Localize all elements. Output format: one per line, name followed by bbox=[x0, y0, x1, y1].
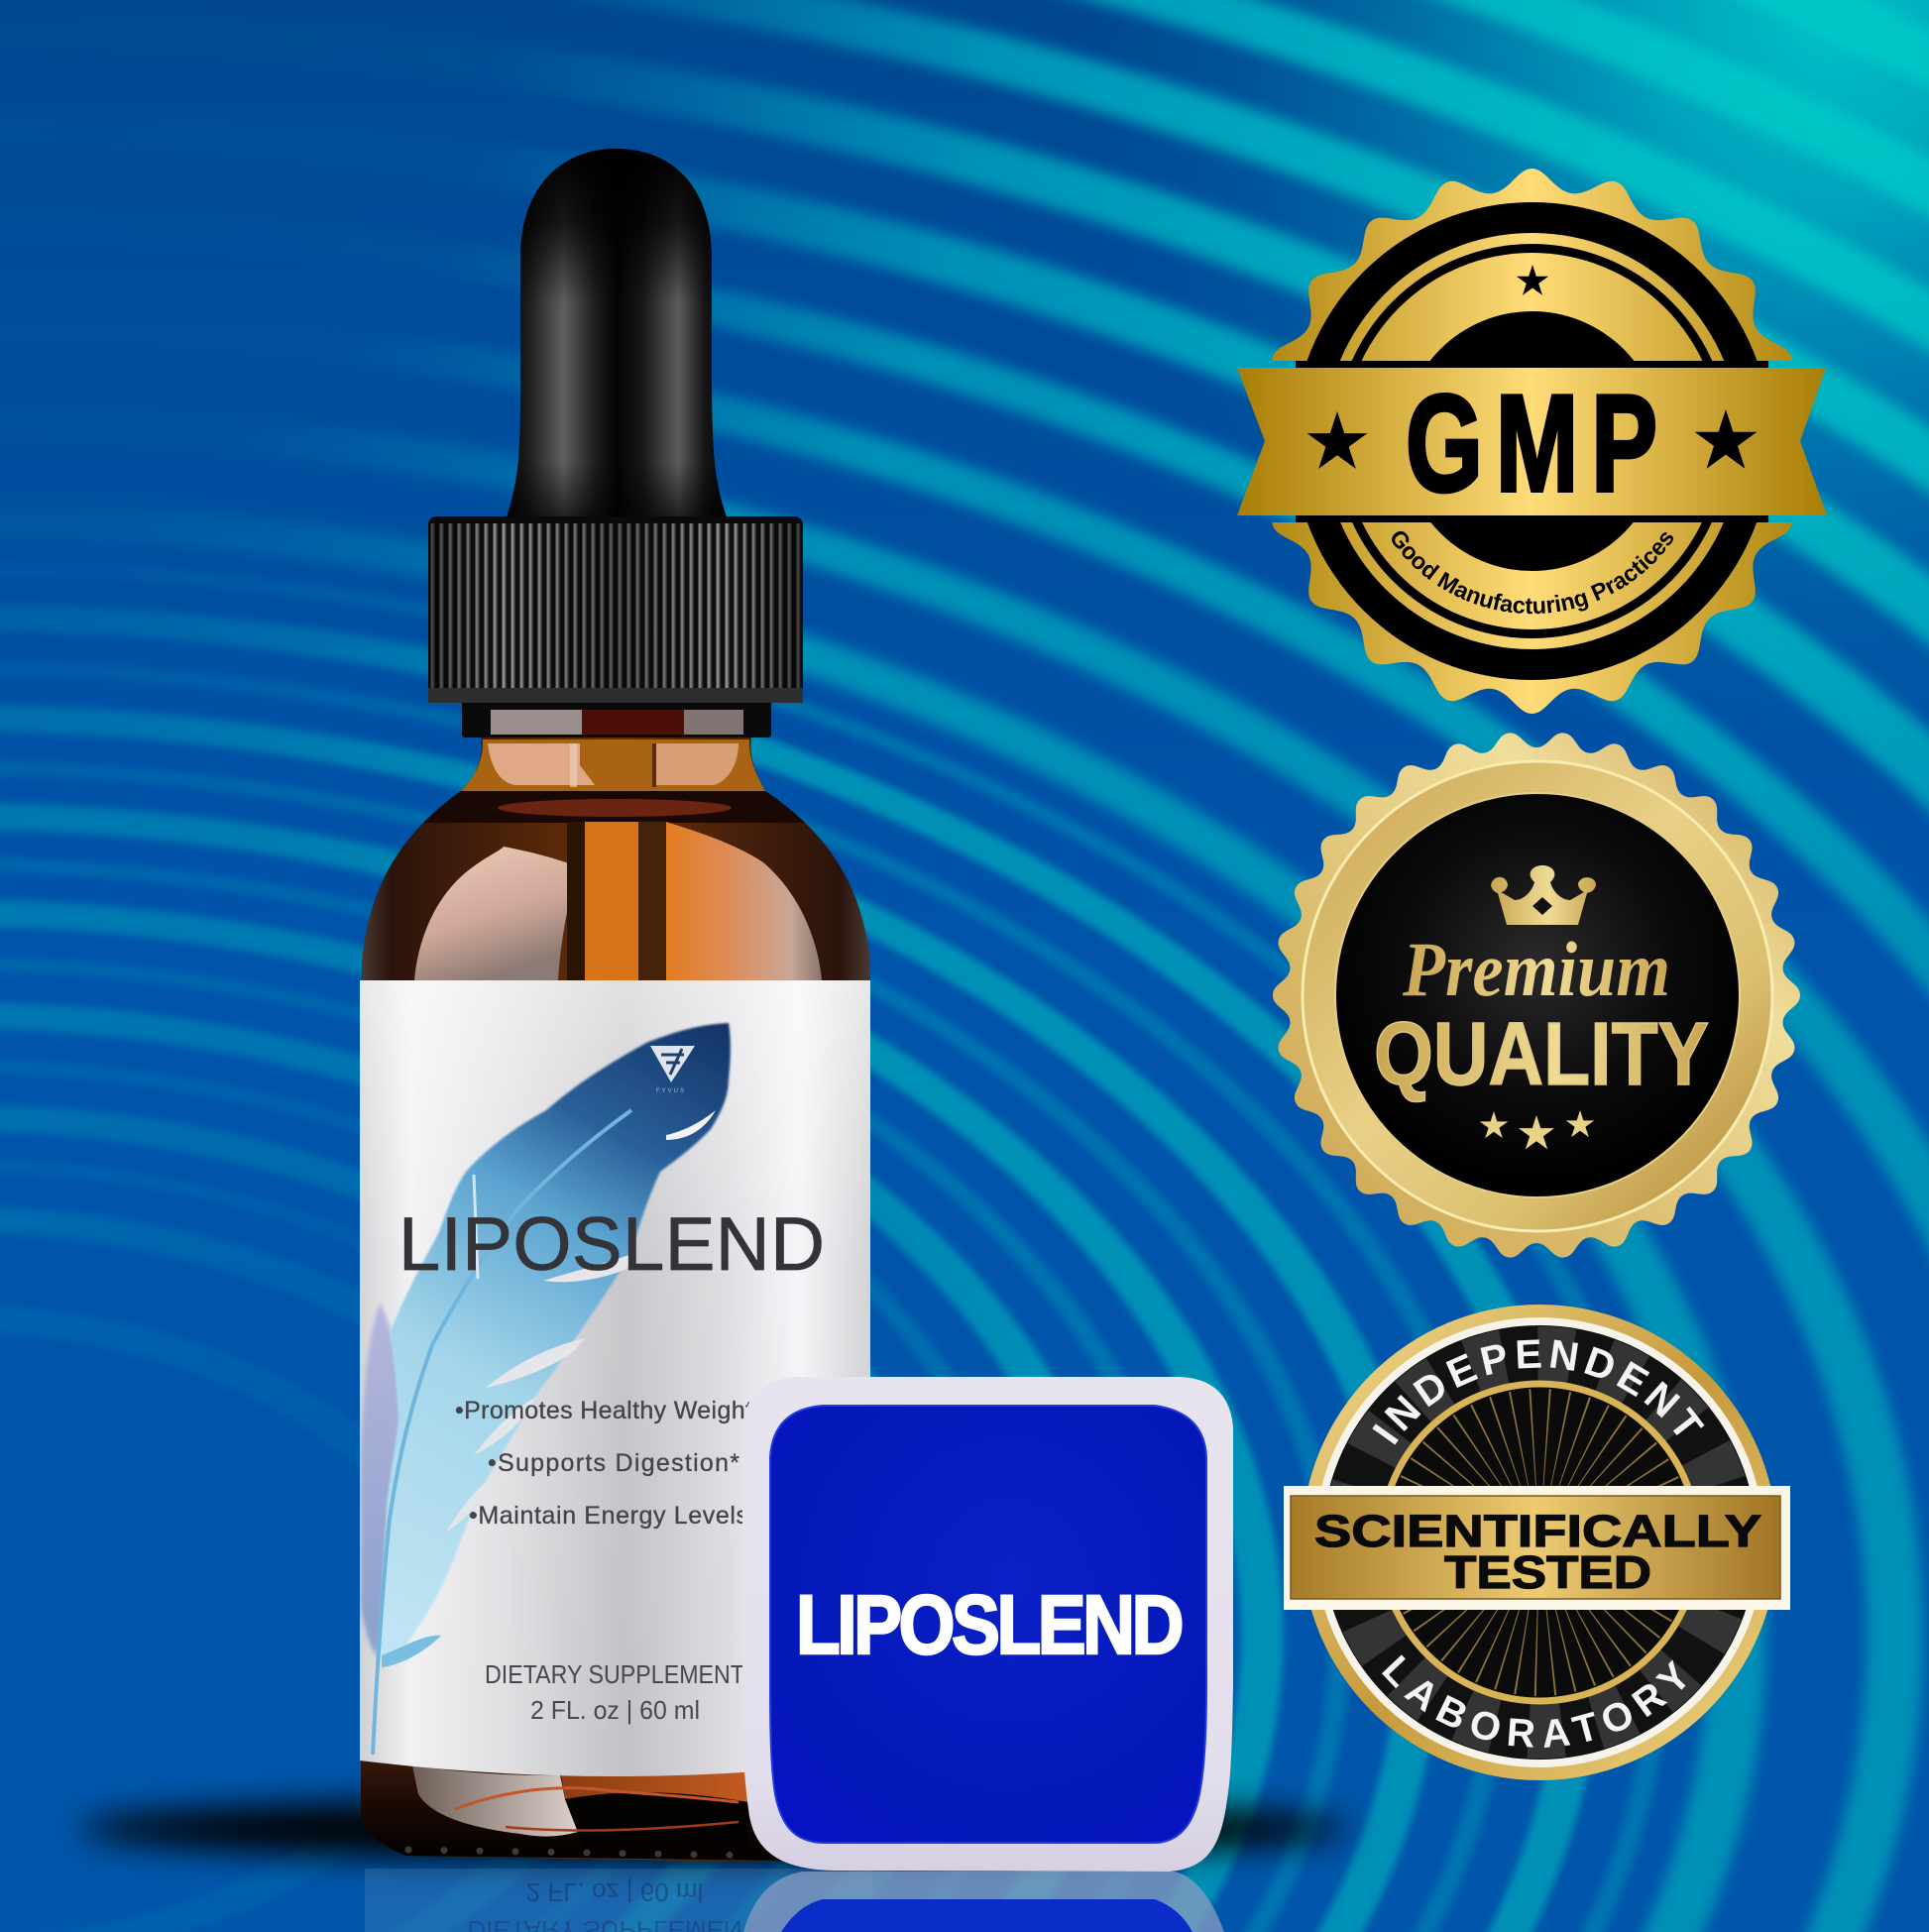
label benefit list: •Maintain Energy Levels bbox=[469, 1502, 748, 1530]
label bbox=[360, 980, 870, 1776]
label volume text: 2 FL. oz | 60 ml bbox=[530, 1695, 700, 1725]
bottle base bbox=[361, 1755, 870, 1862]
label brand name: LIPOSLEND bbox=[398, 1202, 825, 1287]
dropper bulb bbox=[507, 149, 727, 517]
bottle and box reflection bbox=[365, 1869, 1224, 1932]
tested ribbon: TESTED bbox=[1444, 1546, 1651, 1598]
dropper cap collar bbox=[462, 701, 771, 738]
icon: top star bbox=[1517, 265, 1548, 295]
premium script: Premium bbox=[1402, 926, 1670, 1012]
sunburst rays bbox=[1448, 1451, 1631, 1634]
badge ring text top: INDEPENDENT bbox=[1372, 1339, 1705, 1445]
floor shadow bbox=[79, 1797, 1348, 1861]
box brand name: LIPOSLEND bbox=[796, 1578, 1182, 1671]
bottle and box reflection: 2 FL. oz | 60 ml bbox=[526, 1877, 703, 1907]
badge: premium quality bbox=[1269, 728, 1804, 1263]
label volume text bbox=[485, 1659, 744, 1725]
tested ribbon: SCIENTIFICALLY bbox=[1314, 1506, 1761, 1556]
glass body bbox=[361, 738, 870, 1862]
GMP ribbon bbox=[1237, 368, 1827, 515]
icon: three stars bbox=[1480, 1110, 1594, 1149]
GMP subtitle: Good Manufacturing Practices bbox=[1392, 531, 1673, 615]
ribbed cap bbox=[428, 516, 803, 703]
label benefit list: •Supports Digestion* bbox=[488, 1449, 739, 1477]
GMP heading: GMP bbox=[1406, 367, 1670, 520]
product box bbox=[742, 1377, 1233, 1872]
quality heading: QUALITY bbox=[1374, 1005, 1709, 1104]
badge: scientifically tested bbox=[1284, 1305, 1790, 1780]
label benefit list bbox=[455, 1397, 762, 1530]
label benefit list: •Promotes Healthy Weight* bbox=[455, 1397, 762, 1424]
badge ring text bottom: LABORATORY bbox=[1382, 1654, 1685, 1749]
icon: crown bbox=[1491, 865, 1596, 925]
badge: GMP bbox=[1237, 169, 1827, 714]
icon: ribbon left star bbox=[1307, 411, 1367, 469]
bottle bbox=[360, 149, 870, 1862]
tested ribbon bbox=[1284, 1486, 1790, 1610]
brand logo mark: FYVUS bbox=[656, 1088, 686, 1094]
label volume text: DIETARY SUPPLEMENT bbox=[485, 1659, 744, 1689]
brand logo mark bbox=[650, 1046, 695, 1094]
icon: ribbon right star bbox=[1695, 409, 1757, 469]
feather illustration bbox=[361, 1023, 731, 1755]
